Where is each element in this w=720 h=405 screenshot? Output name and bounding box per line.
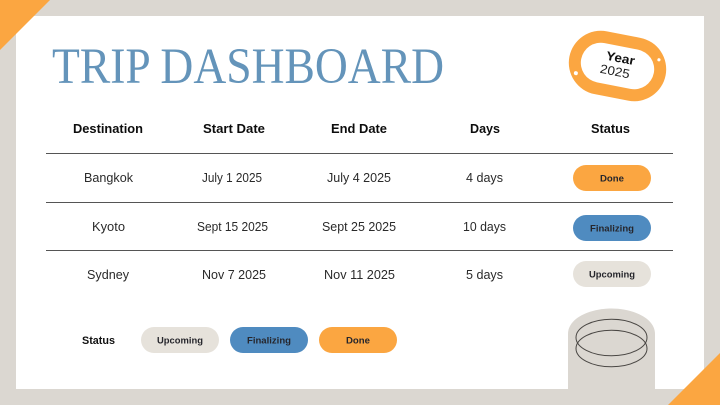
table row: Sydney: Sydney (87, 268, 130, 282)
table row: Bangkok: Done (600, 174, 624, 184)
status legend: Done (346, 336, 370, 346)
status legend: Status (82, 335, 115, 347)
status legend (82, 327, 397, 353)
table row: Sydney: Nov 7 2025 (202, 268, 266, 282)
table row: Sydney: Upcoming (589, 270, 635, 280)
table row: Kyoto: 10 days (463, 220, 506, 234)
table row: Sydney: Nov 11 2025 (324, 268, 395, 282)
table row: Bangkok: 4 days (466, 171, 503, 185)
year badge: Year (605, 49, 636, 68)
table row: Bangkok: Bangkok (84, 171, 134, 185)
table row: Kyoto: Finalizing (590, 224, 634, 234)
year badge (563, 25, 672, 107)
table row: Kyoto: Sept 25 2025 (322, 220, 396, 234)
table header: Days (470, 121, 500, 136)
table row: Kyoto: Kyoto (92, 220, 125, 234)
table row: Sydney (87, 261, 651, 287)
table row: Kyoto: Sept 15 2025 (197, 220, 268, 234)
table header: Status (591, 121, 630, 136)
table row: Bangkok: July 1 2025 (202, 171, 262, 185)
table row: Kyoto (92, 215, 651, 241)
status legend: Upcoming (157, 336, 203, 346)
table header: End Date (331, 121, 387, 136)
year badge: 2025 (599, 62, 631, 81)
status legend: Finalizing (247, 336, 291, 346)
decorative orange corner top left (0, 0, 50, 50)
table row: Sydney: 5 days (466, 268, 503, 282)
title: TRIP DASHBOARD (52, 39, 444, 95)
table header (73, 121, 630, 136)
decorative orange corner bottom right (668, 353, 720, 405)
table row: Bangkok (84, 165, 651, 191)
decorative arch with overlapping ellipses (568, 308, 655, 389)
table header: Start Date (203, 121, 265, 136)
table header: Destination (73, 121, 143, 136)
table row: Bangkok: July 4 2025 (327, 171, 391, 185)
